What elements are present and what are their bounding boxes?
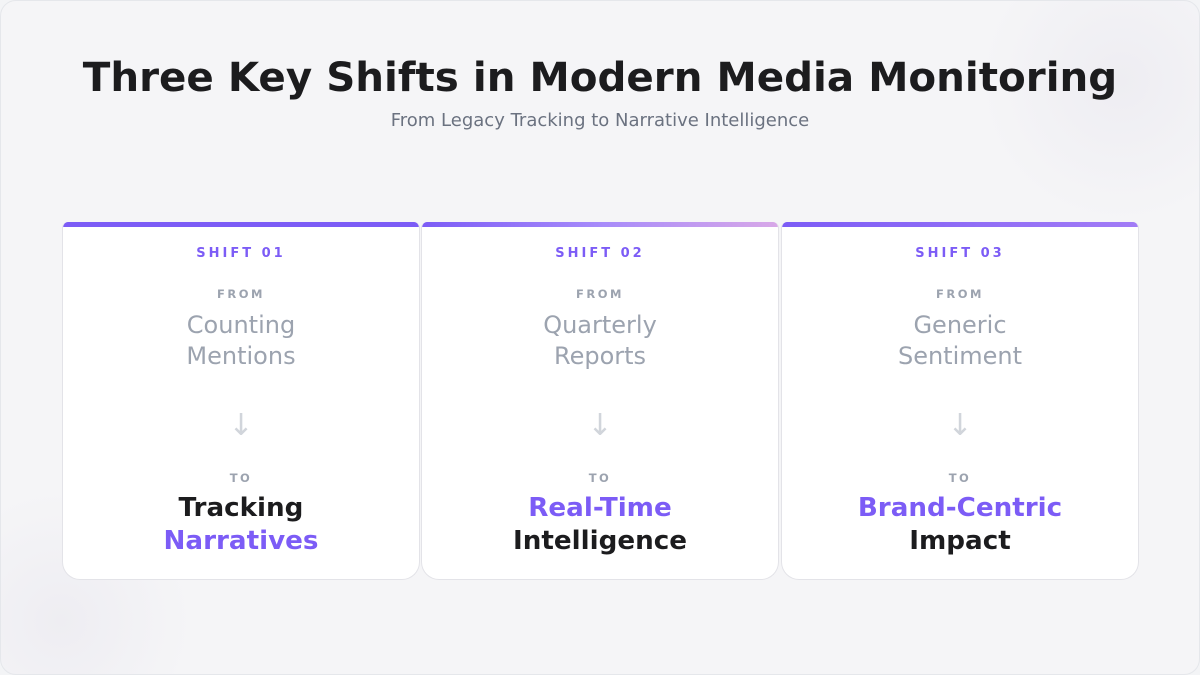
- from text: [186, 311, 296, 370]
- from text: Mentions: [186, 342, 296, 370]
- from text: Generic: [913, 311, 1007, 339]
- from label: FROM: [576, 287, 624, 301]
- from text: [898, 311, 1022, 370]
- from text: Sentiment: [898, 342, 1022, 370]
- label: shift 01: SHIFT 01: [196, 246, 286, 261]
- to text: Impact: [909, 526, 1011, 556]
- to label: TO: [230, 471, 252, 485]
- to text: [163, 493, 318, 556]
- from text: [543, 311, 657, 370]
- from label: FROM: [217, 287, 265, 301]
- from text: Reports: [554, 342, 646, 370]
- to text: Intelligence: [513, 526, 687, 556]
- panel: shift 03: [781, 222, 1139, 580]
- from text: Quarterly: [543, 311, 657, 339]
- label: shift 03: SHIFT 03: [915, 246, 1005, 261]
- arrow: ↓: [587, 408, 613, 443]
- to label: TO: [949, 471, 971, 485]
- arrow: ↓: [228, 408, 254, 443]
- to text: Tracking: [179, 493, 303, 523]
- panel: shift 01: [62, 222, 420, 580]
- to label: TO: [589, 471, 611, 485]
- to text: [858, 493, 1062, 556]
- from label: FROM: [936, 287, 984, 301]
- label: shift 02: SHIFT 02: [555, 246, 645, 261]
- to text: Brand-Centric: [858, 493, 1062, 523]
- to text: Narratives: [163, 526, 318, 556]
- from text: Counting: [187, 311, 295, 339]
- subtitle: From Legacy Tracking to Narrative Intelligence: [391, 110, 809, 131]
- panel: shift 02: [421, 222, 779, 580]
- to text: Real-Time: [528, 493, 672, 523]
- arrow: ↓: [947, 408, 973, 443]
- title: Three Key Shifts in Modern Media Monitoring: [83, 53, 1117, 101]
- to text: [513, 493, 687, 556]
